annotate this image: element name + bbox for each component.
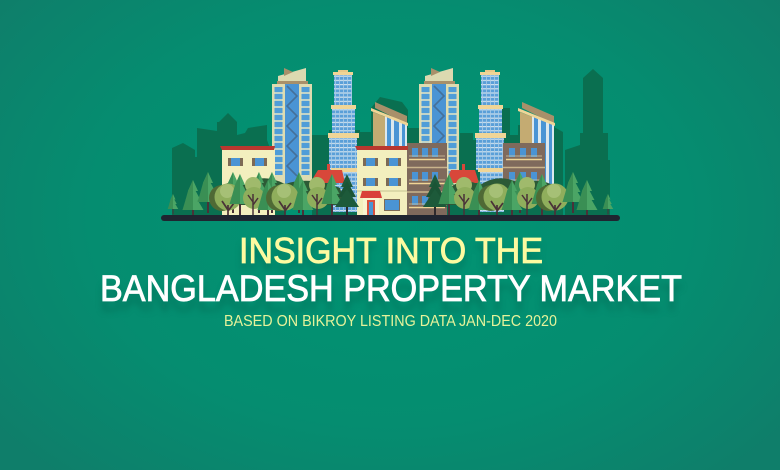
building: right glass tower — [419, 68, 459, 194]
subtitle: BASED ON BIKROY LISTING DATA JAN-DEC 2020 — [224, 313, 557, 330]
roof: right red roof — [445, 164, 479, 183]
title shadow: INSIGHT INTO THE — [239, 237, 543, 278]
title shadow — [100, 237, 682, 319]
silhouette: distant skyline left — [172, 113, 285, 215]
building: right round tower — [475, 70, 506, 212]
building: brown apartment block — [407, 143, 447, 215]
title line 2: BANGLADESH PROPERTY MARKET — [100, 268, 682, 309]
building: left round tower — [328, 70, 359, 212]
silhouette: distant tower right — [565, 69, 610, 215]
roof: left red roof — [310, 164, 345, 183]
illustration: city skyline — [161, 68, 620, 221]
building: right curved glass block — [518, 102, 555, 200]
building: right brown apartment block — [503, 143, 545, 193]
ground line — [161, 215, 620, 221]
silhouette: distant skyline centre — [312, 97, 563, 215]
title shadow: BANGLADESH PROPERTY MARKET — [100, 278, 682, 319]
building: left cream house — [220, 146, 275, 215]
building: left glass tower — [272, 68, 312, 194]
building: curved glass block — [371, 102, 408, 200]
trees: left group — [168, 172, 359, 221]
trees: right group — [423, 172, 613, 221]
title line 1: INSIGHT INTO THE — [239, 230, 543, 271]
building: centre cream house — [355, 146, 408, 215]
